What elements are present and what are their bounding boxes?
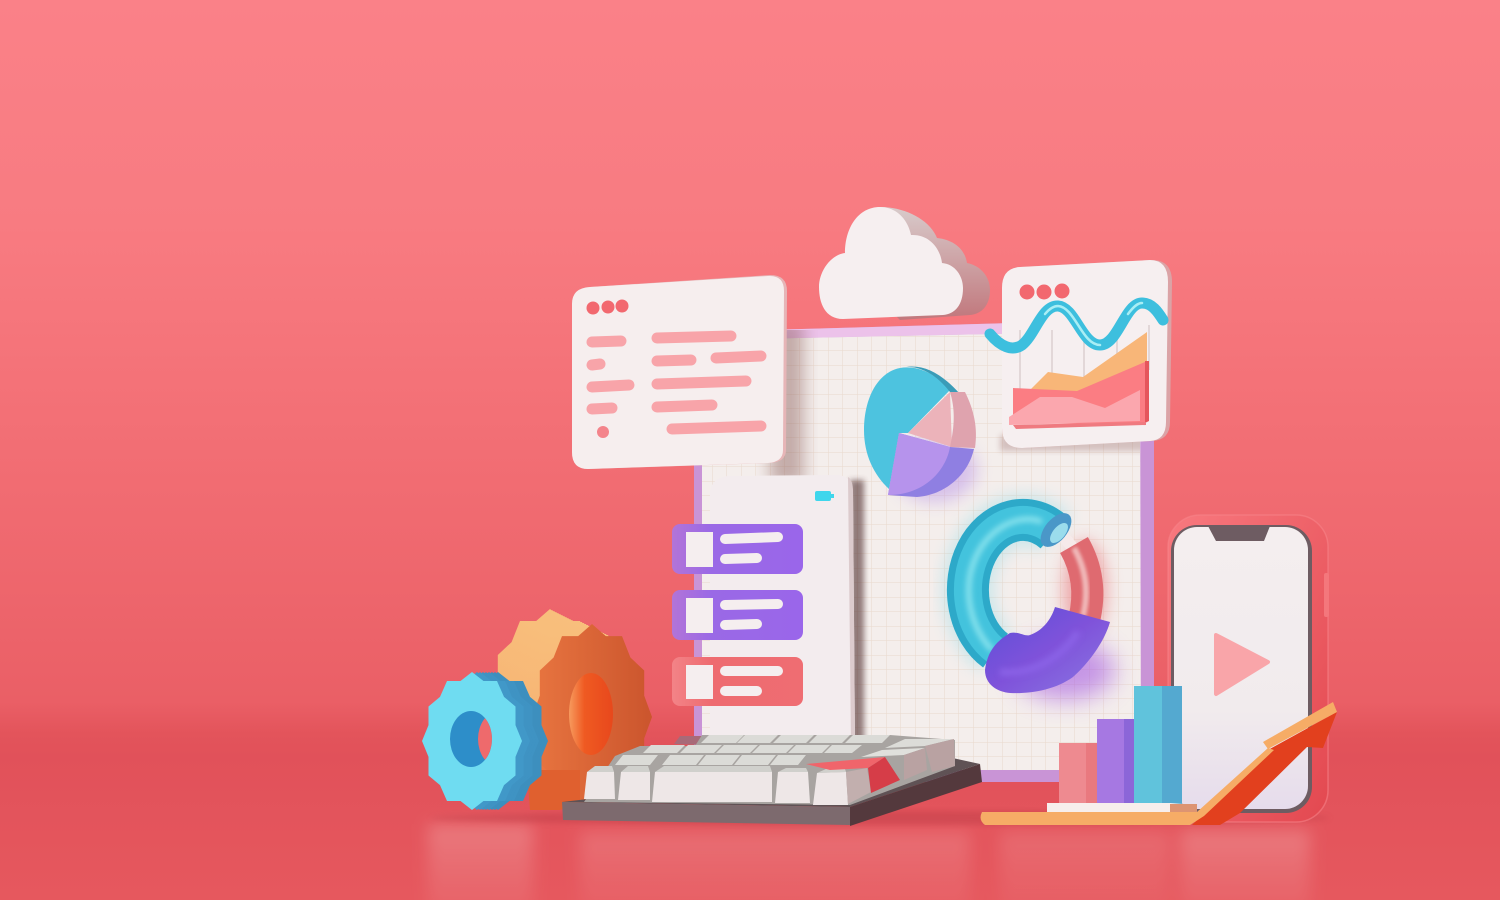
- keyboard: [562, 735, 982, 826]
- cloud icon: [819, 207, 990, 320]
- list item red: [672, 657, 803, 706]
- window dots: [1020, 284, 1070, 300]
- list item purple 2: [672, 590, 803, 640]
- tablet card: [710, 475, 855, 745]
- line and area chart card: [990, 260, 1172, 448]
- code window card: [572, 275, 787, 469]
- orange gear: [490, 609, 652, 810]
- donut chart icon: [968, 508, 1115, 700]
- red area: [1013, 362, 1145, 424]
- board panel: [694, 319, 1170, 782]
- phone icon: [1168, 515, 1329, 822]
- list item purple 1: [672, 524, 803, 574]
- code lines: [592, 336, 761, 429]
- growth arrow: [981, 702, 1337, 825]
- right keys: [885, 739, 954, 748]
- pink area: [1009, 390, 1140, 425]
- floor reflections: [428, 824, 1310, 900]
- wave line: [990, 303, 1163, 348]
- ring cap and inner tube: [1058, 532, 1078, 556]
- red key: [806, 757, 900, 793]
- teal ring: [968, 519, 1055, 651]
- chart gridlines: [1020, 325, 1149, 395]
- blue gear: [422, 672, 548, 810]
- purple ring segment: [985, 607, 1110, 693]
- bar chart: [1047, 686, 1197, 815]
- keys: [584, 735, 955, 805]
- window dots: [586, 300, 628, 314]
- pie chart icon: [864, 366, 977, 502]
- orange area: [1030, 332, 1147, 392]
- play button: [1216, 635, 1268, 694]
- red ring segment: [1074, 545, 1087, 620]
